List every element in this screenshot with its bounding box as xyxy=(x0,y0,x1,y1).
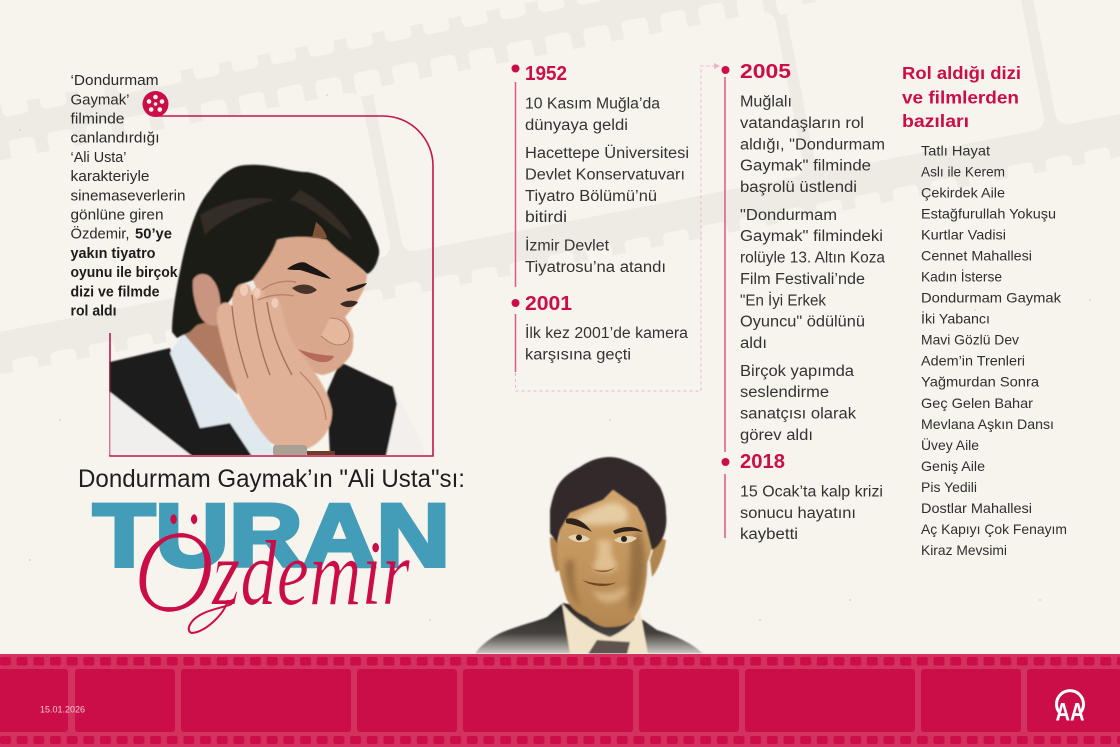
icon: film reel xyxy=(142,91,168,117)
intro text: Özdemir, xyxy=(70,225,130,243)
list of series and films: Mavi Gözlü Dev xyxy=(921,332,1019,348)
timeline column 2: "En İyi Erkek xyxy=(740,291,826,309)
timeline column 2: aldığı, "Dondurmam xyxy=(740,136,885,153)
list of series and films: Dostlar Mahallesi xyxy=(921,500,1032,516)
intro text: yakın tiyatro xyxy=(70,246,156,262)
list of series and films: İki Yabancı xyxy=(921,310,990,327)
timeline column 1: 2001 xyxy=(525,293,572,315)
timeline column 1: Tiyatro Bölümü’nü xyxy=(525,188,657,205)
background film strip xyxy=(0,0,1120,377)
footer film strip xyxy=(0,654,1120,747)
timeline column 2: sonucu hayatını xyxy=(740,505,856,522)
intro text: ‘Dondurmam xyxy=(70,73,158,89)
list of series and films: Kurtlar Vadisi xyxy=(921,226,1006,242)
timeline column 2: Oyuncu" ödülünü xyxy=(740,314,865,331)
logo: AA: AA xyxy=(1056,698,1084,726)
title: Dondurmam Gaymak’ın "Ali Usta"sı: xyxy=(78,465,465,493)
timeline column 1: 1952 xyxy=(525,63,567,85)
list of series and films: Adem’in Trenleri xyxy=(921,353,1025,369)
timeline column 1: karşısına geçti xyxy=(525,347,631,364)
paper specks xyxy=(19,94,1091,621)
intro text: gönlüne giren xyxy=(70,208,164,224)
portrait photo: sepia headshot xyxy=(475,457,703,654)
list of series and films: Aç Kapıyı Çok Fenayım xyxy=(921,521,1067,537)
intro text xyxy=(70,73,186,320)
name: Turan: TURAN xyxy=(93,485,450,585)
intro text: rol aldı xyxy=(70,304,116,320)
intro text: dizi ve filmde xyxy=(70,284,160,300)
timeline column 2: seslendirme xyxy=(740,384,829,401)
intro text: sinemaseverlerin xyxy=(70,188,186,204)
heading: roles xyxy=(902,63,1021,131)
list of series and films: Geniş Aile xyxy=(921,458,985,474)
list of series and films: Kadın İsterse xyxy=(921,268,1002,284)
intro text: Gaymak’ xyxy=(70,92,130,108)
list of series and films: Geç Gelen Bahar xyxy=(921,395,1033,411)
timeline column 1: Devlet Konservatuvarı xyxy=(525,167,685,184)
list of series and films: Üvey Aile xyxy=(921,436,979,453)
timeline column 2: Film Festivali’nde xyxy=(740,271,865,288)
heading: roles: ve filmlerden xyxy=(902,87,1019,107)
intro text: 50’ye xyxy=(135,227,172,243)
timeline column 2: görev aldı xyxy=(740,427,813,444)
list of series and films: Tatlı Hayat xyxy=(921,142,990,158)
list of series and films: Kiraz Mevsimi xyxy=(921,542,1007,558)
list of series and films: Çekirdek Aile xyxy=(921,184,1005,200)
intro text: filminde xyxy=(70,112,124,128)
intro text: karakteriyle xyxy=(70,169,150,185)
name: Özdemir script: Ö xyxy=(131,506,216,637)
timeline column 1 xyxy=(512,63,720,391)
timeline column 2: 15 Ocak’ta kalp krizi xyxy=(740,484,883,501)
timeline column 1: bitirdi xyxy=(525,209,567,226)
portrait photo: man resting cheek on hand xyxy=(110,165,426,456)
timeline column 2: Birçok yapımda xyxy=(740,363,854,380)
portrait frame line xyxy=(110,116,433,456)
intro text: ‘Ali Usta’ xyxy=(70,150,126,166)
timeline column 1: Hacettepe Üniversitesi xyxy=(525,144,689,162)
list of series and films: Aslı ile Kerem xyxy=(921,163,1005,179)
list of series and films xyxy=(921,142,1067,558)
date: 15.01.2026 xyxy=(40,704,85,716)
list of series and films: Estağfurullah Yokuşu xyxy=(921,205,1056,221)
list of series and films: Pis Yedili xyxy=(921,479,977,495)
timeline column 2: rolüyle 13. Altın Koza xyxy=(740,250,885,267)
logo: AA xyxy=(1056,691,1084,726)
list of series and films: Cennet Mahallesi xyxy=(921,248,1032,264)
heading: roles: bazıları xyxy=(902,111,969,131)
timeline column 2: Gaymak" filmindeki xyxy=(740,228,883,245)
timeline column 1: İzmir Devlet xyxy=(525,237,610,255)
timeline column 2: "Dondurmam xyxy=(740,207,837,224)
list of series and films: Mevlana Aşkın Dansı xyxy=(921,416,1054,432)
timeline column 2: Muğlalı xyxy=(740,94,792,111)
name: Özdemir script: zdemir xyxy=(210,522,411,624)
intro text: canlandırdığı xyxy=(70,131,160,147)
name: Özdemir script xyxy=(131,506,411,637)
timeline column 2: 2005 xyxy=(740,61,791,83)
timeline column 2: başrolü üstlendi xyxy=(740,179,857,196)
timeline column 2: Gaymak" filminde xyxy=(740,158,871,175)
timeline column 2: vatandaşların rol xyxy=(740,115,864,132)
timeline column 2: aldı xyxy=(740,335,767,352)
list of series and films: Dondurmam Gaymak xyxy=(921,290,1062,306)
timeline column 1: İlk kez 2001’de kamera xyxy=(525,324,688,342)
timeline column 1: 10 Kasım Muğla’da xyxy=(525,96,660,113)
timeline column 2: sanatçısı olarak xyxy=(740,406,856,423)
timeline column 2: 2018 xyxy=(740,451,785,473)
timeline column 2: kaybetti xyxy=(740,526,798,543)
heading: roles: Rol aldığı dizi xyxy=(902,63,1021,83)
list of series and films: Yağmurdan Sonra xyxy=(921,374,1039,390)
timeline column 1: Tiyatrosu’na atandı xyxy=(525,259,666,276)
intro text: oyunu ile birçok xyxy=(70,265,178,281)
timeline column 1: dünyaya geldi xyxy=(525,117,628,134)
timeline column 2 xyxy=(722,61,885,543)
